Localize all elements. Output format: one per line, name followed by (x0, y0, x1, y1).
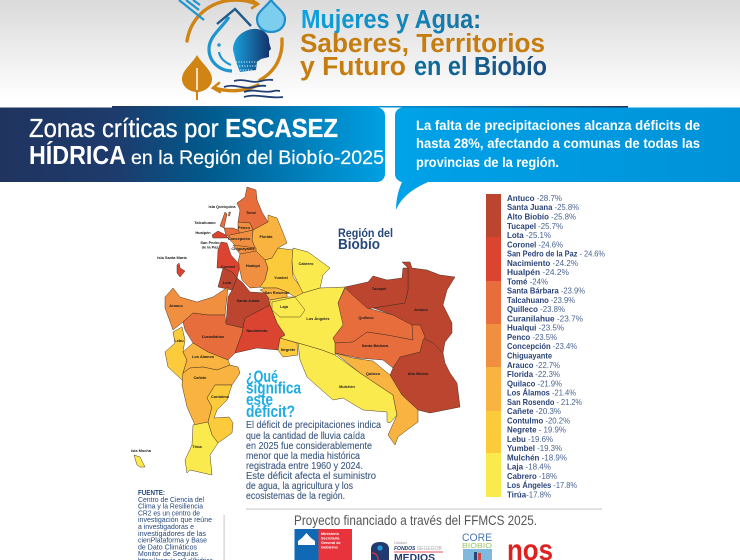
legend list: Los Álamos -21.4% (507, 387, 576, 398)
logo title: y Futuro (300, 53, 406, 81)
legend colour bar (486, 194, 501, 497)
legend list: Lota -25.1% (507, 230, 552, 240)
map labels: Quilleco (358, 315, 374, 320)
top header rule (112, 106, 628, 108)
legend list: Coronel -24.6% (507, 239, 564, 249)
map labels: Lebu (174, 338, 184, 343)
map labels: Curanilahue (202, 334, 225, 339)
map labels: Quilaco (366, 371, 381, 376)
legend list: Tomé -24% (507, 276, 549, 286)
logo: CORE Biobío: CORE (462, 532, 492, 544)
map labels: de la Paz (202, 244, 218, 250)
icon: waves (224, 80, 283, 97)
legend list: Santa Juana -25.8% (507, 202, 579, 212)
map labels: Cabrero (299, 261, 314, 266)
map heading: Región del Biobío (338, 226, 393, 253)
map labels: Cañete (194, 375, 207, 380)
legend list: Tucapel -25.7% (507, 221, 564, 231)
map labels (131, 204, 429, 453)
legend list: Curanilahue -23.7% (507, 313, 584, 323)
legend list: Talcahuano -23.9% (507, 295, 575, 305)
source note: a investigadoras e (138, 522, 194, 531)
legend list: Nacimiento -24.2% (507, 258, 579, 268)
legend list: Yumbel -19.3% (507, 443, 563, 453)
heading: ¿Qué significa este déficit?: déficit? (246, 403, 295, 421)
logo title: Mujeres y Agua: (301, 6, 481, 34)
heading: HÍDRICA (29, 140, 126, 170)
logo title (300, 6, 547, 81)
legend list: Laja -18.4% (507, 462, 552, 472)
logo: Fondos Medios: Unidad (394, 540, 407, 545)
source note: FUENTE: (138, 488, 165, 497)
logo: Ministerio Secretaría General de Gobierno: Ministerio (321, 532, 340, 536)
map labels: Negrete (281, 347, 296, 352)
callout text: provincias de la región. (416, 154, 559, 170)
map labels: Isla Santa María (157, 255, 188, 260)
map labels: Tomé (246, 210, 257, 215)
map labels: Tirúa (192, 444, 203, 449)
map labels: Florida (260, 234, 273, 239)
map labels: San Pedro (200, 240, 220, 245)
map labels: Yumbel (274, 275, 288, 280)
legend list: Tirúa-17.8% (507, 490, 552, 500)
logo: Ministerio Secretaría General de Gobierno (294, 529, 352, 560)
map heading: Región del Biobío: Región del (338, 226, 393, 240)
east communes (298, 262, 460, 445)
islands (134, 212, 230, 467)
heading: ¿Qué significa este déficit?: este (246, 391, 273, 409)
legend list: Hualpén -24.2% (507, 267, 570, 277)
legend list: Hualqui -23.5% (507, 323, 565, 333)
callout text: La falta de precipitaciones alcanza déficits de (416, 117, 700, 133)
choropleth map (131, 187, 460, 475)
legend list: Negrete - 19.9% (507, 425, 567, 435)
source note: CR2 es un centro de (138, 508, 200, 517)
explanatory paragraph: menor que la media histórica (246, 451, 360, 462)
heading: en la Región del Biobío-2025 (131, 147, 384, 169)
legend list: Arauco -22.7% (507, 360, 560, 370)
icon: orange cycle ring (187, 0, 282, 92)
panel: title banner (0, 108, 385, 182)
source note: cienPlataforma y Base (138, 536, 207, 545)
legend list: Alto Biobío -25.8% (507, 212, 577, 222)
logo: Ministerio Secretaría General de Gobierno: Secretaría (321, 536, 340, 540)
map labels: Tucapel (372, 286, 386, 291)
map heading: Región del Biobío: Biobío (338, 237, 380, 253)
central communes (165, 248, 345, 360)
heading: ¿Qué significa este déficit?: significa (246, 380, 302, 398)
explanatory paragraph: de agua, la agricultura y los (246, 481, 353, 492)
source note: de Dato Climáticos (138, 542, 197, 551)
south communes (165, 327, 240, 475)
map labels: Alto Biobío (408, 371, 429, 376)
map labels: Santa Bárbara (362, 343, 389, 348)
map labels: Santa Juana (237, 298, 260, 303)
callout text (416, 117, 700, 170)
legend list: Quilleco -23.8% (507, 304, 566, 314)
legend list: Mulchén -18.9% (507, 452, 568, 462)
map labels: Isla Quiriquina (208, 204, 236, 209)
heading: ¿Qué significa este déficit? (246, 368, 302, 421)
source note: investigadores de las (138, 529, 206, 538)
top grey background (0, 0, 740, 100)
source note: Centro de Ciencia del (138, 495, 204, 504)
legend list: Cañete -20.3% (507, 406, 562, 416)
heading: ¿Qué significa este déficit?: ¿Qué (246, 368, 278, 386)
logo emblem (179, 0, 285, 100)
icon: head silhouette (233, 29, 271, 72)
map labels: Concepción (228, 236, 251, 241)
source note (138, 488, 214, 560)
north communes (212, 187, 287, 290)
legend list: Penco -23.5% (507, 332, 558, 342)
map labels: Lota (223, 280, 232, 285)
map labels: San Rosendo (265, 290, 290, 295)
logo title: en el Biobío (414, 53, 547, 81)
legend list: Florida -22.3% (507, 369, 561, 379)
icon: dispersing dots (234, 62, 258, 74)
legend list: San Pedro de la Paz - 24.6% (507, 249, 605, 259)
map labels: Isla Mocha (131, 448, 152, 453)
legend list: Chiguayante (507, 350, 552, 360)
icon: fork lines (179, 0, 204, 20)
map labels: Laja (280, 304, 289, 309)
explanatory paragraph: registrada entre 1960 y 2024. (246, 461, 363, 472)
logo: Ministerio Secretaría General de Gobierno: Gobierno (321, 546, 339, 550)
map labels: Antuco (414, 307, 428, 312)
map labels: Hualqui (246, 263, 260, 268)
legend list: Contulmo -20.2% (507, 415, 571, 425)
map labels: Talcahuano (194, 220, 216, 225)
explanatory paragraph: ecosistemas de la región. (246, 491, 345, 502)
map labels: Los Álamos (192, 354, 214, 359)
panel: speech bubble statement (395, 108, 740, 210)
map labels: Contulmo (211, 394, 230, 399)
logo: Fondos Medios (371, 540, 443, 560)
legend list: Santa Bárbara -23.9% (507, 286, 585, 296)
callout text: hasta 28%, afectando a comunas de todas las (416, 135, 700, 151)
logo: Ministerio Secretaría General de Gobierno: General de (321, 541, 341, 545)
map labels: Los Ángeles (306, 316, 330, 321)
logo: CORE Biobío (462, 532, 492, 560)
explanatory paragraph: en 2025 fue considerablemente (246, 441, 372, 452)
legend list: Concepción -23.4% (507, 341, 577, 351)
map labels: Chiguayante (231, 246, 256, 251)
map labels: Arauco (169, 303, 183, 308)
logo: Fondos Medios: FONDOS SEGEGOB (394, 546, 442, 552)
heading (29, 113, 384, 170)
map labels: Penco (238, 225, 250, 230)
icon: big water drop (209, 17, 232, 71)
legend list (507, 193, 605, 500)
source note: Clima y la Resiliencia (138, 502, 204, 511)
legend list: San Rosendo - 21.2% (507, 397, 582, 407)
logo: CORE Biobío: BIOBIO (462, 541, 492, 550)
map labels: Hualpén (195, 230, 211, 235)
map labels: Mulchén (339, 384, 356, 389)
legend list: Los Ángeles -17.8% (507, 479, 577, 490)
source note: investigación que reúne (138, 515, 212, 524)
funding statement: Proyecto financiado a través del FFMCS 2025. (294, 512, 537, 528)
legend list: Lebu -19.6% (507, 434, 554, 444)
heading: Zonas críticas por ESCASEZ (29, 113, 338, 143)
source note: Monitor de Sequías (138, 549, 198, 558)
icon: small water drop (257, 0, 285, 32)
icon: leaf (182, 55, 212, 100)
legend list: Antuco -28.7% (507, 193, 563, 203)
icon: drop roof (217, 9, 251, 26)
map labels: Coronel (221, 264, 235, 269)
legend list: Cabrero -18% (507, 471, 558, 481)
explanatory paragraph: Este déficit afecta el suministro (246, 471, 376, 482)
explanatory paragraph (246, 420, 381, 502)
legend list: Quilaco -21.9% (507, 378, 562, 388)
logo title: Saberes, Territorios (300, 30, 545, 58)
explanatory paragraph: que la cantidad de lluvia caída (246, 431, 365, 442)
explanatory paragraph: El déficit de precipitaciones indica (246, 420, 381, 431)
map labels: Nacimiento (247, 328, 268, 333)
